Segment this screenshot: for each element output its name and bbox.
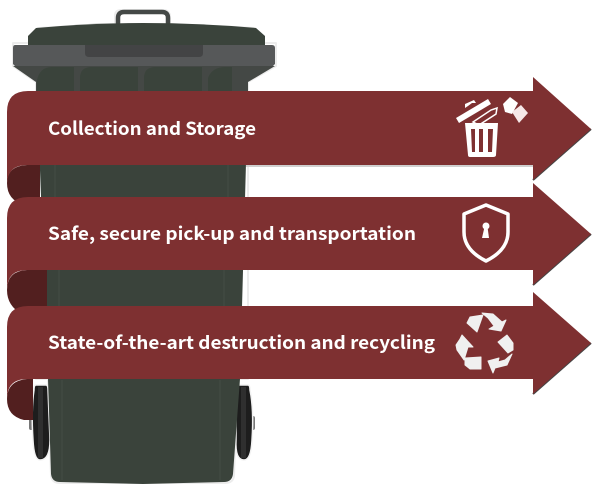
- ribbon arrow 1: [7, 77, 591, 185]
- lid rim: [13, 45, 275, 66]
- wheelie bin: [13, 10, 276, 484]
- bin outline halo: [13, 10, 276, 483]
- icon: trash can with recyclables: [456, 97, 528, 157]
- heading: safe pick-up: Safe, secure pick-up and transportation: [48, 220, 416, 246]
- left wheel: [29, 385, 50, 460]
- icon: recycling arrows: [456, 313, 513, 373]
- under-rim taper: [13, 66, 275, 91]
- icon: shield with keyhole: [464, 205, 508, 261]
- right wheel: [236, 385, 255, 460]
- heading: destruction and recycling: State-of-the-art destruction and recycling: [48, 329, 435, 355]
- under-rim panels: [37, 67, 232, 91]
- lid handle: [118, 12, 168, 25]
- ribbon arrow 2: [7, 183, 591, 290]
- lid dome: [28, 23, 265, 46]
- heading: collection and storage: Collection and Storage: [48, 115, 256, 141]
- ribbon curl 3: [7, 379, 33, 420]
- body ribs: [55, 165, 228, 480]
- ribbon arrow 3: [7, 292, 591, 399]
- lid notch: [85, 45, 203, 57]
- bin body: [36, 66, 248, 484]
- ribbon curl 2: [7, 270, 47, 314]
- ribbon curl 1: [7, 165, 40, 205]
